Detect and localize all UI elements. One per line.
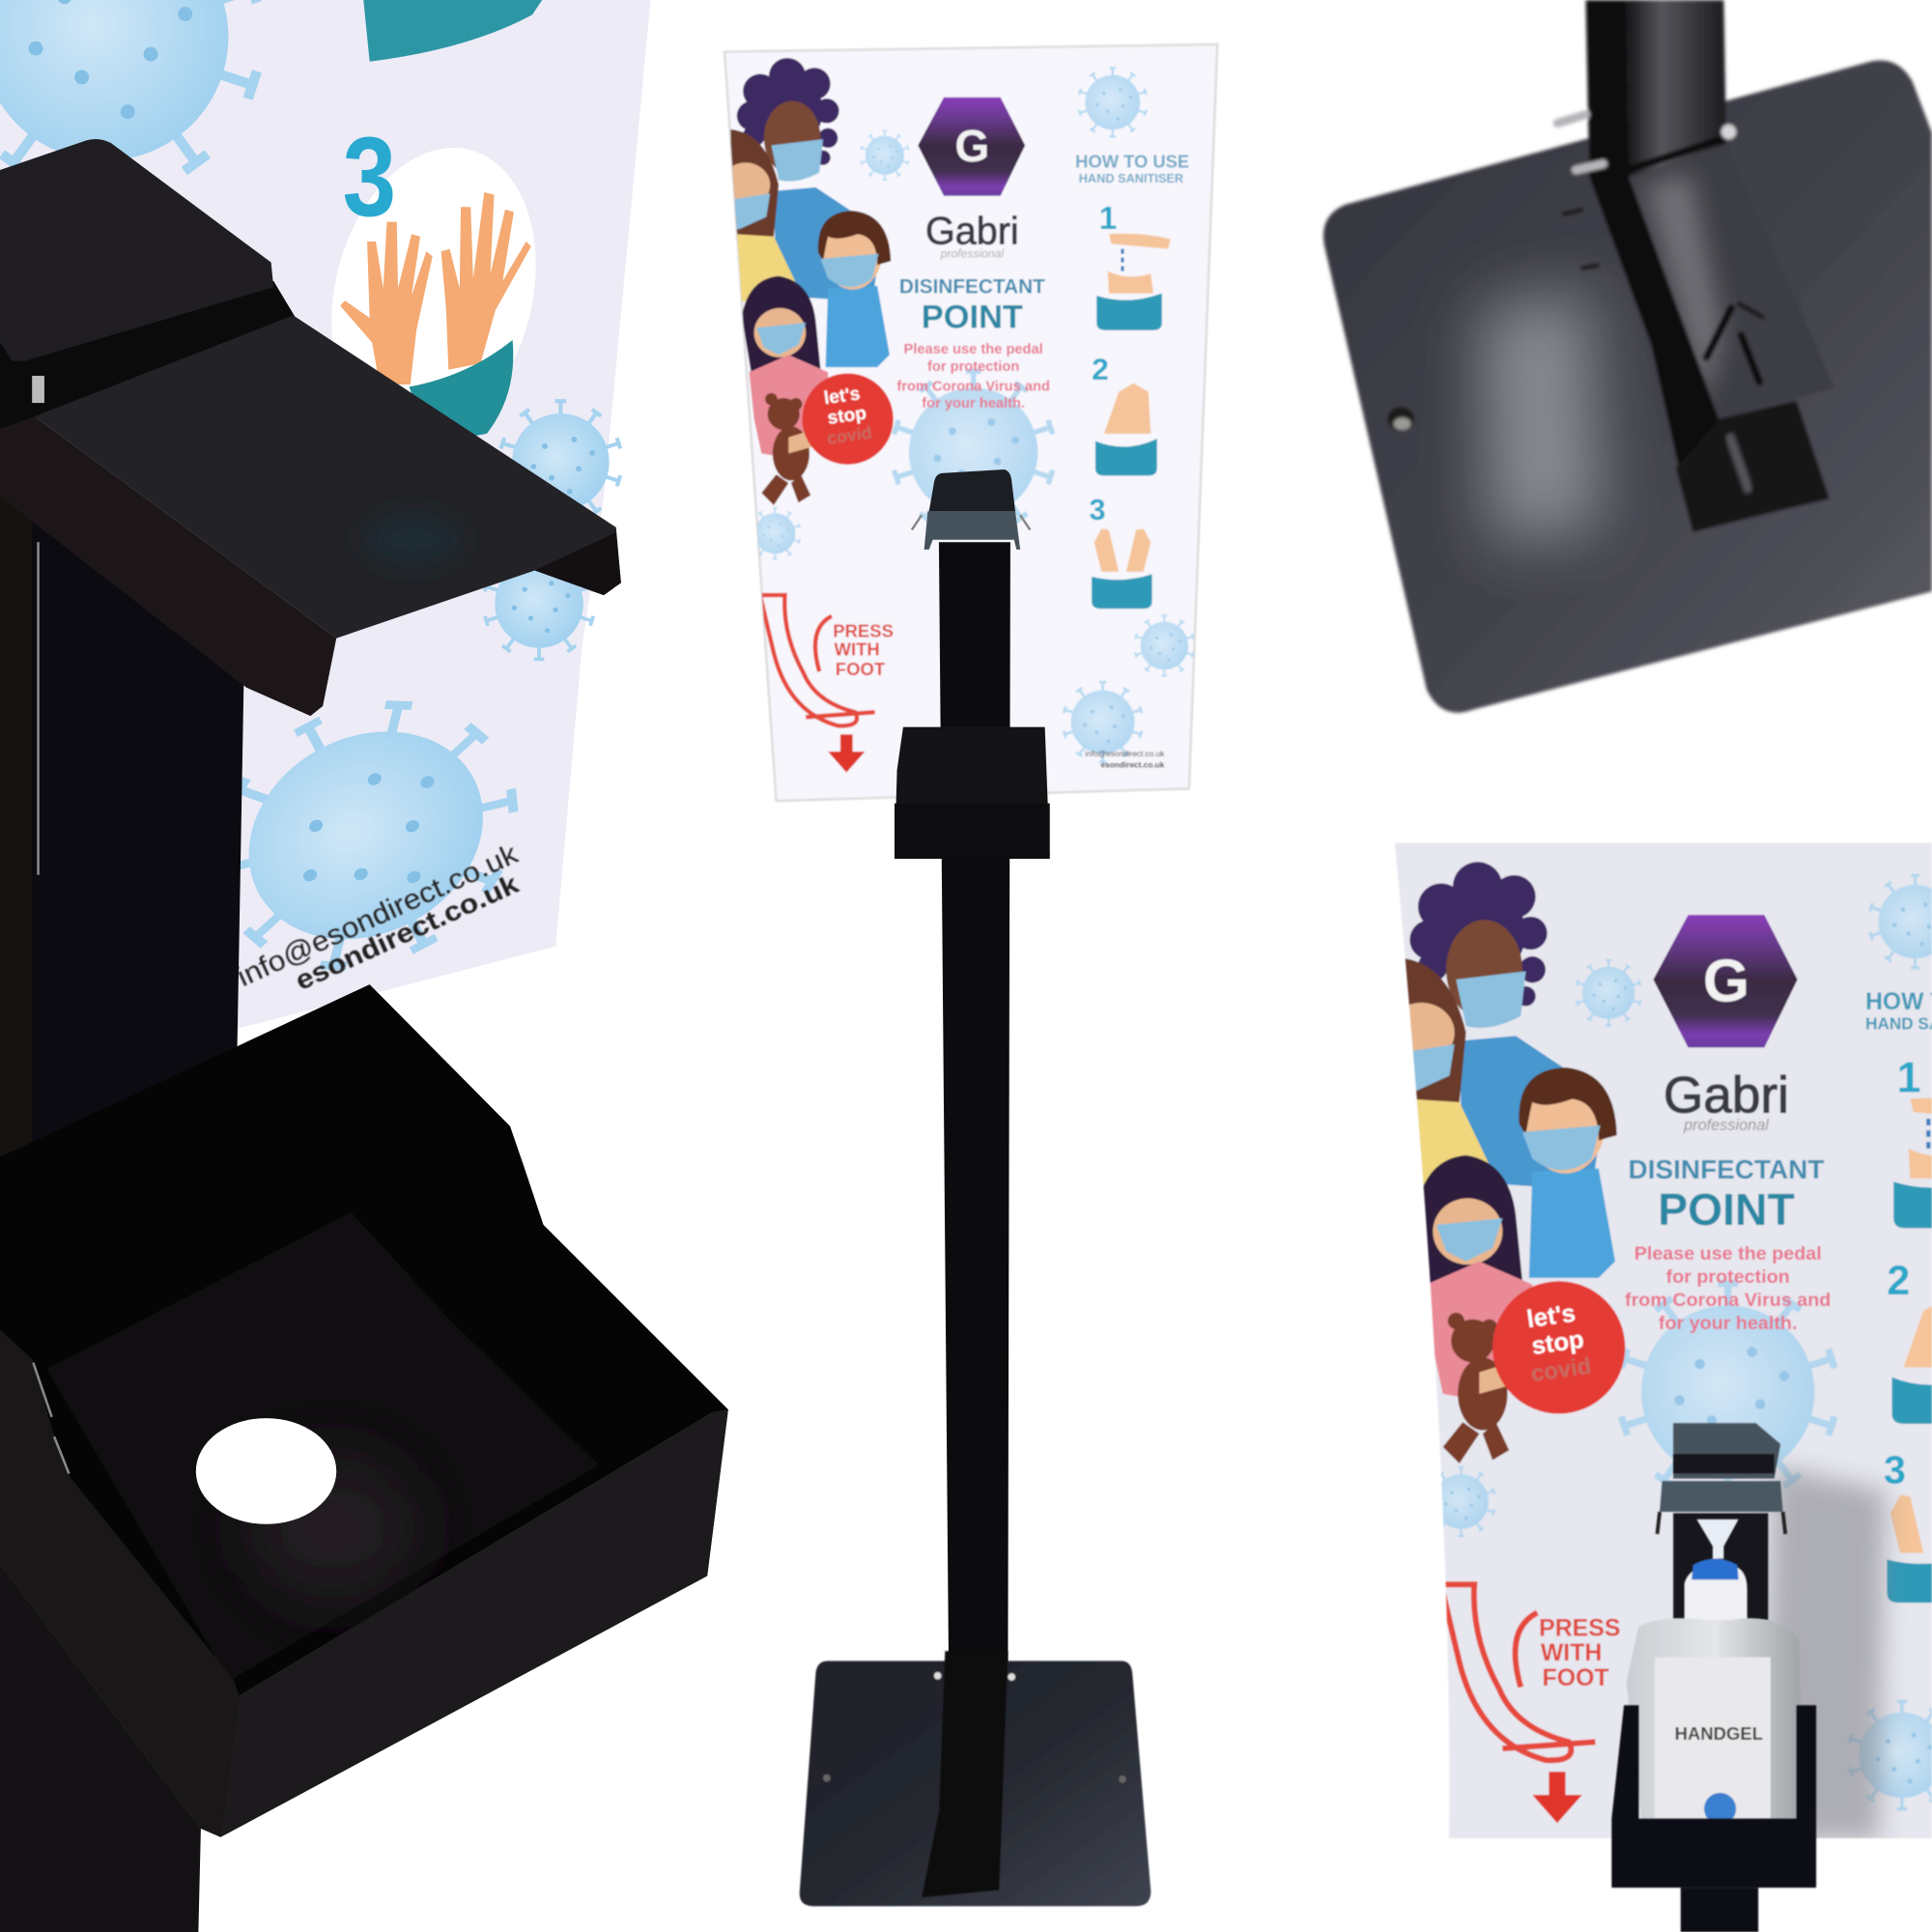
instruction text: for protection (927, 359, 1019, 375)
small website text: esondirect.co.uk (1101, 760, 1165, 770)
hand lever plate (0, 316, 621, 716)
instruction text: from Corona Virus and (896, 379, 1050, 394)
logo hexagon (1654, 915, 1798, 1047)
press with foot: FOOT (1543, 1664, 1609, 1691)
bolts (1557, 115, 1736, 269)
brand name: Gabri (925, 211, 1019, 253)
website text on close-up poster: esondirect.co.uk (291, 868, 524, 996)
pole close-up (32, 522, 243, 1142)
small website text (1085, 749, 1165, 770)
poster (721, 44, 1217, 801)
brand: professional (1683, 1117, 1769, 1134)
instruction text (1625, 1243, 1831, 1334)
press with foot: FOOT (836, 659, 886, 679)
step numbers: 2 (1887, 1258, 1910, 1304)
cast shadow of stand (1762, 1466, 1886, 1839)
website text on close-up poster: info@esondirect.co.uk (232, 838, 523, 993)
heading: POINT (1658, 1184, 1795, 1235)
press with foot (833, 620, 894, 679)
instruction text: for protection (1666, 1266, 1790, 1288)
how to use heading (1865, 989, 1932, 1034)
light reflection (1479, 290, 1602, 542)
badge: let's stop covid: covid (1529, 1353, 1593, 1387)
instruction text: for your health. (922, 396, 1025, 412)
badge: let's stop covid (1492, 1281, 1625, 1414)
step numbers: 1 (1897, 1055, 1921, 1102)
teal label top (363, 0, 542, 62)
heading: POINT (922, 298, 1023, 335)
poster artwork: children, hands, foot arrow (1388, 862, 1932, 1823)
lower pole close-up (0, 1564, 201, 1932)
brand: Gabri (1663, 1066, 1789, 1123)
poster artwork: children, hands, foot arrow (721, 58, 1194, 773)
plate (1323, 61, 1932, 713)
badge: let's stop covid: stop (826, 404, 867, 429)
logo hexagon: G (955, 121, 989, 171)
logo hexagon (918, 98, 1025, 196)
panel: full stand centre (721, 44, 1217, 1906)
base plate (800, 1651, 1151, 1906)
poster (1388, 842, 1932, 1839)
panel: close-up of dispenser bracket and drip tray (0, 0, 728, 1932)
heading: DISINFECTANT (899, 276, 1045, 298)
hand gel bottle (1627, 1520, 1803, 1825)
badge: let's stop covid (802, 373, 894, 465)
pole (939, 542, 1010, 1886)
instruction text (896, 342, 1050, 412)
step numbers: 3 (1090, 494, 1106, 526)
small website text: info@esondirect.co.uk (1085, 749, 1165, 758)
panel: base plate close-up (1323, 0, 1932, 713)
instruction text: for your health. (1659, 1313, 1797, 1334)
poster background in close-up (0, 0, 650, 1029)
how to use heading: HOW TO USE (1075, 151, 1189, 171)
badge: let's stop covid: stop (1530, 1326, 1585, 1360)
bracket (1658, 1423, 1785, 1620)
top bracket (912, 469, 1030, 550)
drip tray (0, 984, 728, 1837)
tray drain hole (196, 1418, 336, 1524)
virus illustrations on close-up poster (0, 0, 620, 1014)
small drip tray (895, 727, 1050, 859)
top bracket block (0, 139, 296, 431)
heading: DISINFECTANT (1629, 1154, 1824, 1184)
instruction text: Please use the pedal (904, 342, 1043, 357)
illustration: washing hands step 3 (331, 148, 535, 436)
step numbers: 2 (1092, 352, 1109, 386)
logo hexagon: G (1703, 948, 1749, 1014)
instruction text: from Corona Virus and (1625, 1290, 1831, 1311)
hole (1387, 407, 1414, 431)
badge: let's stop covid: let's (823, 384, 862, 409)
heading (1629, 1154, 1824, 1235)
badge: let's stop covid: let's (1525, 1300, 1577, 1333)
how to use heading (1075, 151, 1189, 185)
brand name: professional (940, 247, 1004, 261)
step numbers: 3 (1884, 1448, 1906, 1492)
press with foot: PRESS (833, 620, 894, 640)
instruction text: Please use the pedal (1634, 1243, 1822, 1264)
press with foot: WITH (1541, 1639, 1602, 1666)
heading (899, 276, 1045, 335)
badge: let's stop covid: covid (826, 423, 873, 448)
hand gel bottle: HANDGEL (1675, 1723, 1763, 1744)
step numbers (1884, 1055, 1921, 1492)
press with foot: PRESS (1539, 1614, 1620, 1641)
press with foot (1539, 1614, 1620, 1691)
pole and foot bracket (1586, 0, 1834, 532)
tray and pole (1611, 1705, 1816, 1932)
panel: poster with bottle close-up (1388, 842, 1932, 1932)
step numbers: 1 (1099, 201, 1117, 237)
press with foot: WITH (835, 639, 880, 660)
step numbers (1090, 201, 1117, 526)
step number 3: 3 (343, 114, 396, 241)
how to use heading: HAND SANITISER (1079, 171, 1183, 185)
